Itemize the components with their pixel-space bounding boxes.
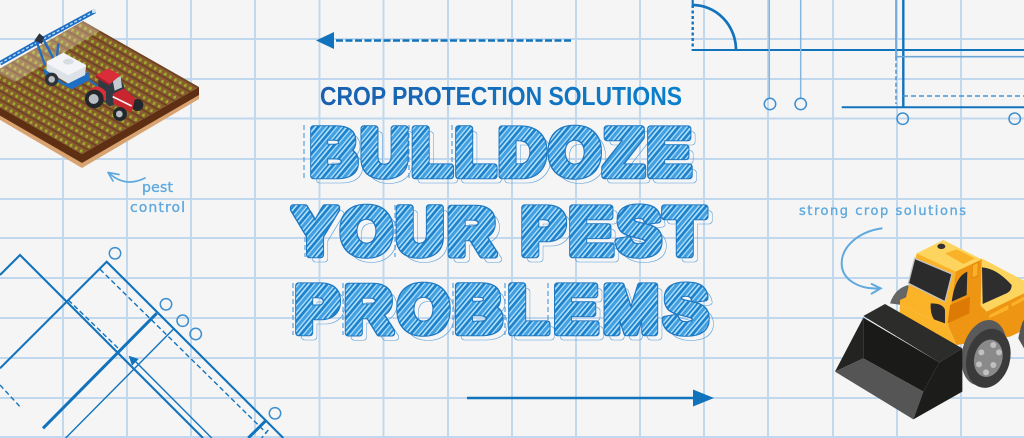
hand arrow: strong crop solutions	[842, 228, 882, 294]
title: PROBLEMS	[295, 272, 708, 346]
arrow: bottom solid right	[467, 390, 714, 406]
title construction marks	[293, 125, 575, 335]
blueprint: top right	[692, 0, 1024, 124]
label: pest control: pest	[142, 180, 174, 196]
label: strong crop solutions: strong crop solutions	[799, 204, 966, 219]
subtitle: CROP PROTECTION SOLUTIONS	[320, 81, 682, 111]
illustration: field with tractor and sprayer	[0, 9, 199, 168]
title: YOUR PEST	[293, 194, 705, 268]
label: pest control: control	[130, 200, 185, 216]
label: pest control	[130, 180, 185, 216]
arrow: top dashed left	[316, 32, 571, 49]
hand arrow: pest control	[108, 172, 145, 182]
blueprint: bottom left	[0, 248, 283, 438]
illustration: bulldozer	[835, 240, 1024, 419]
title: BULLDOZE	[310, 115, 691, 189]
title	[293, 115, 708, 346]
